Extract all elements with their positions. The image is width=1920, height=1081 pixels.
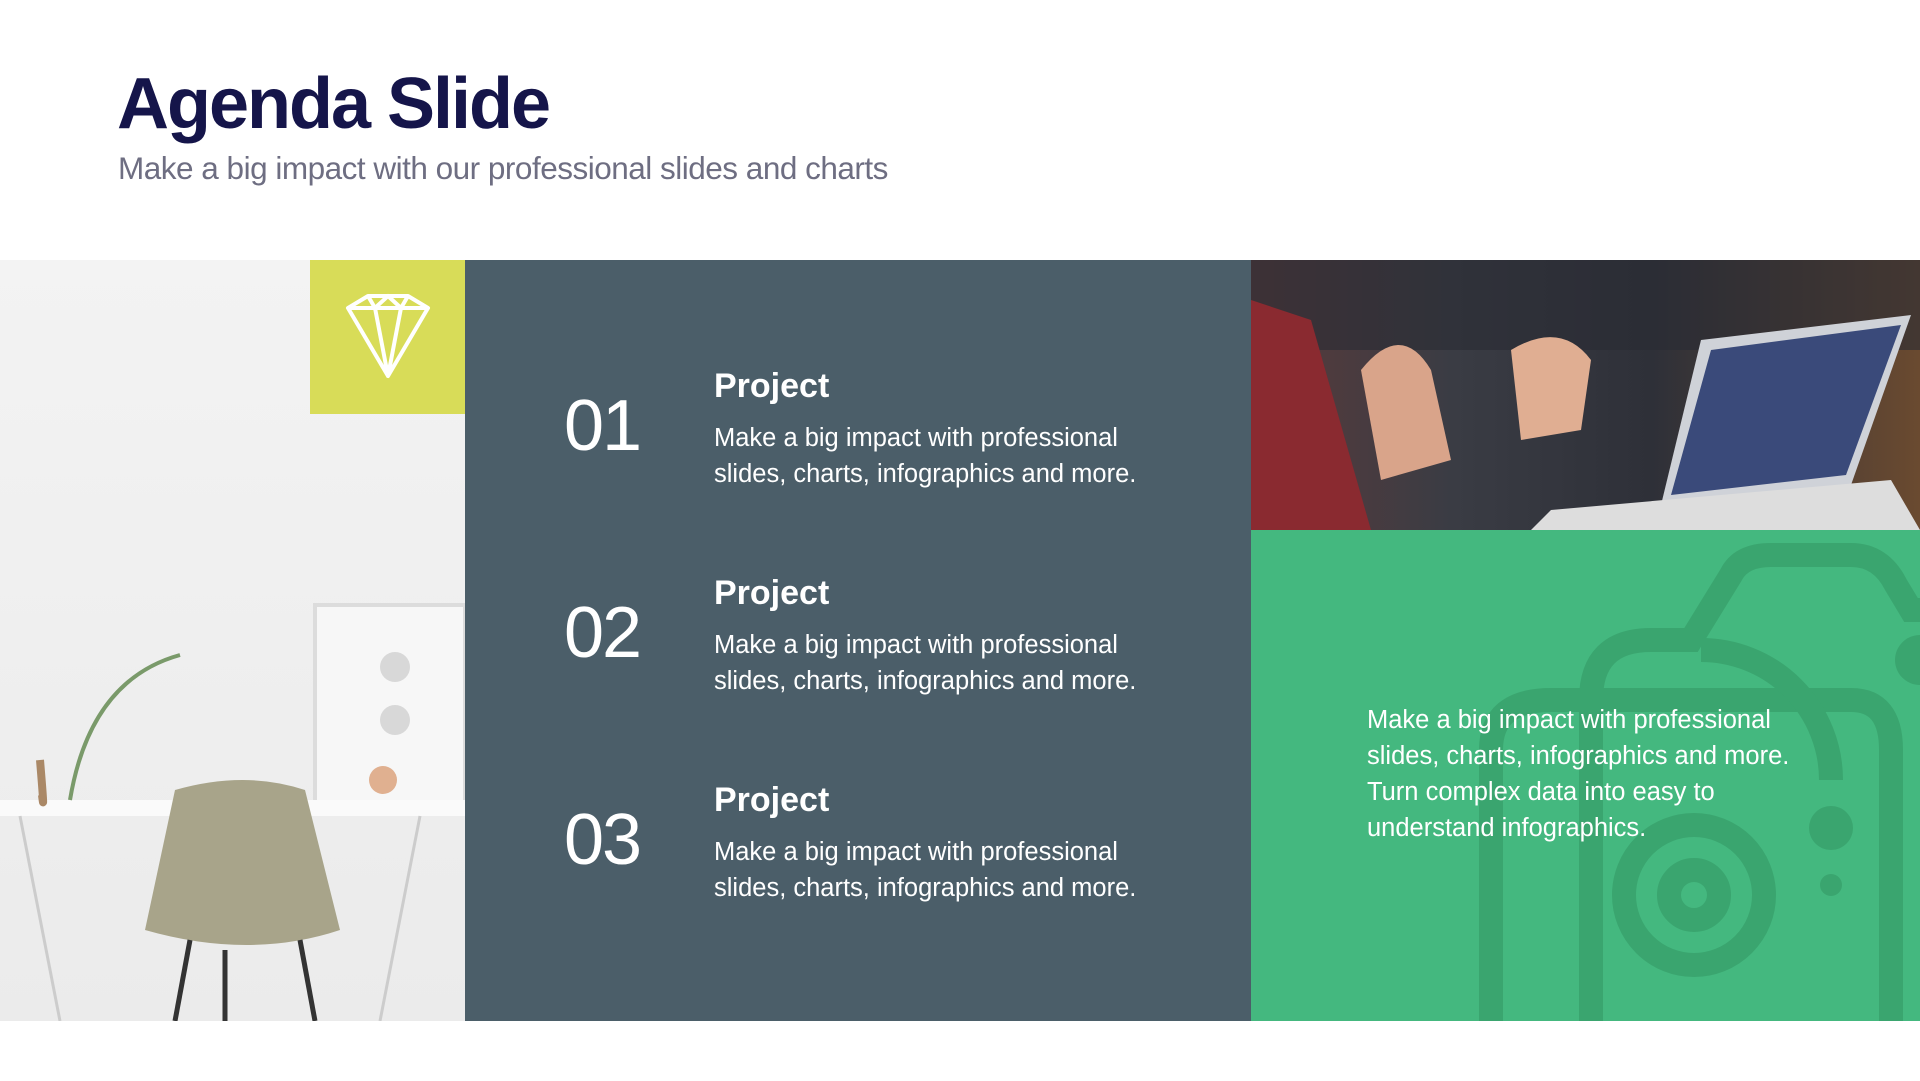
item 02 xyxy=(564,574,1136,695)
text: summary: slides, charts, infographics and more. xyxy=(1367,742,1789,770)
photo: desk and chair xyxy=(0,260,465,1021)
item 03: slides, charts, infographics and more. xyxy=(714,874,1136,902)
item 01: Project xyxy=(714,367,829,405)
icon: diamond on yellow square xyxy=(310,260,465,414)
panel: agenda list xyxy=(465,260,1251,1021)
item 01 xyxy=(564,367,1136,488)
item 01: 01 xyxy=(564,386,640,466)
title: Agenda Slide xyxy=(117,64,549,144)
item 03: Project xyxy=(714,781,829,819)
item 03: Make a big impact with professional xyxy=(714,838,1118,866)
subtitle: Make a big impact with our professional slides and charts xyxy=(118,150,888,186)
text: summary xyxy=(1367,706,1789,842)
item 02: 02 xyxy=(564,593,640,673)
item 03: 03 xyxy=(564,800,640,880)
text: summary: Turn complex data into easy to xyxy=(1367,778,1715,806)
panel: green summary with camera icon xyxy=(1251,530,1920,1021)
text: summary: Make a big impact with professional xyxy=(1367,706,1771,734)
item 02: Make a big impact with professional xyxy=(714,631,1118,659)
item 01: Make a big impact with professional xyxy=(714,424,1118,452)
photo: laptop meeting xyxy=(1251,260,1920,530)
item 01: slides, charts, infographics and more. xyxy=(714,460,1136,488)
item 02: Project xyxy=(714,574,829,612)
text: summary: understand infographics. xyxy=(1367,814,1646,842)
item 02: slides, charts, infographics and more. xyxy=(714,667,1136,695)
item 03 xyxy=(564,781,1136,902)
